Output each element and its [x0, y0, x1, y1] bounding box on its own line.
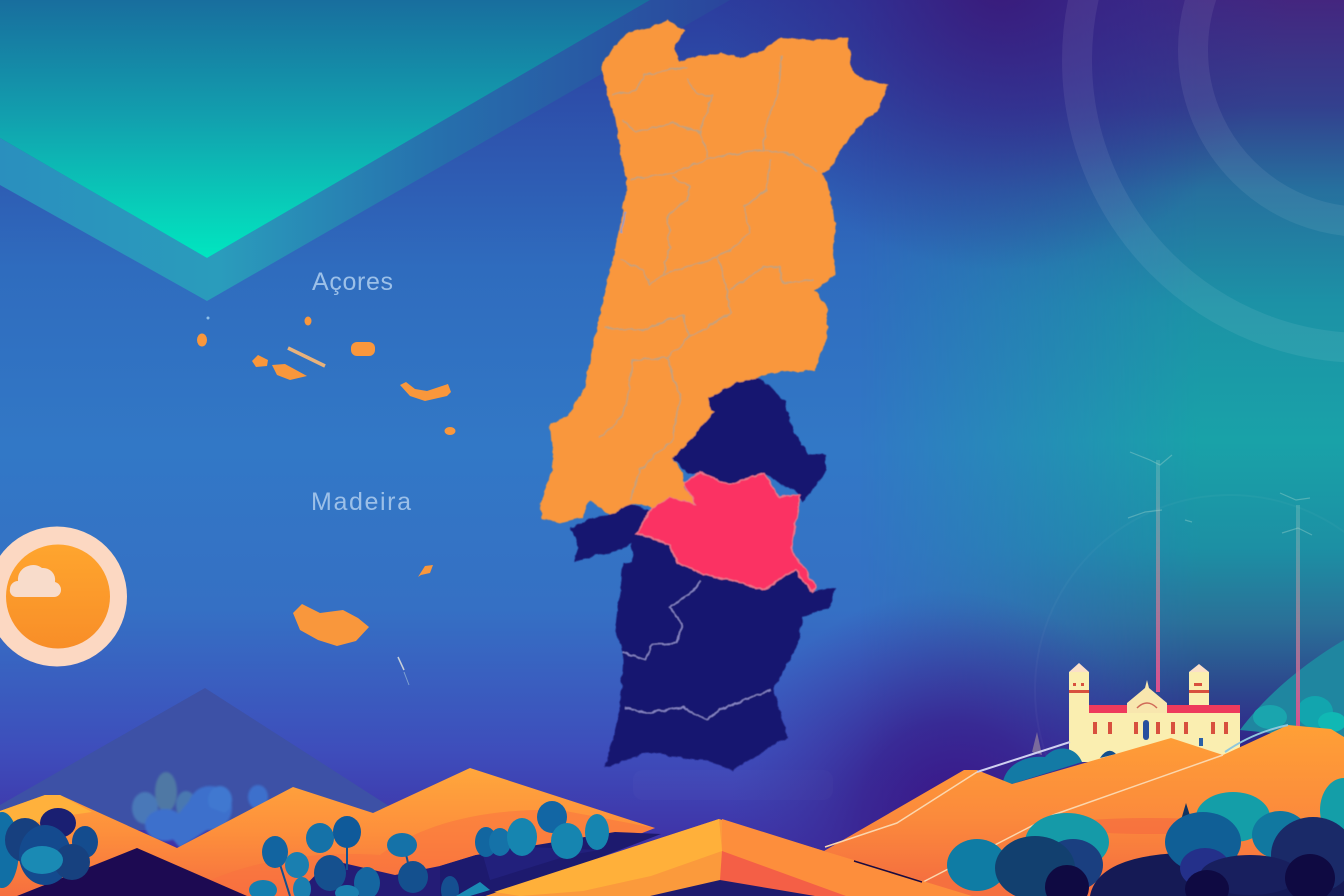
ridge trees: [441, 801, 609, 896]
church building: [1069, 663, 1240, 765]
central foreground mountain: [461, 819, 972, 896]
icon: cloud: [10, 565, 61, 597]
middle trees: [249, 816, 490, 896]
map: mainland Portugal: [540, 20, 888, 770]
top-left chevron band: [0, 0, 730, 301]
dark foothill: [17, 848, 247, 896]
label: Açores: Açores: [312, 268, 393, 296]
poles: [1128, 452, 1312, 730]
right foreground trees: [947, 778, 1344, 896]
region: southern districts (navy): [570, 377, 835, 770]
hill trail lines: [825, 725, 1288, 882]
region: northern and central districts (orange): [540, 20, 888, 523]
back mountain with ghost trees: [0, 688, 392, 848]
trees left of church: [1003, 732, 1116, 784]
sun badge: [0, 526, 127, 666]
district borders north: [600, 57, 817, 500]
label: Madeira: Madeira: [311, 488, 411, 516]
region: Évora (highlighted pink): [637, 473, 817, 592]
top-left chevron: [0, 0, 650, 258]
right orange hills: [824, 725, 1344, 896]
left trees: [0, 808, 98, 888]
islands: Madeira: [293, 565, 433, 685]
concentric arcs top right: [1035, 0, 1344, 885]
right teal background hill: [1240, 640, 1344, 740]
islands: Açores: [197, 316, 456, 435]
left orange mountains: [0, 768, 655, 896]
Aveiro lagoon: [621, 212, 625, 232]
dark ridge behind central peak: [440, 832, 661, 896]
district borders south: [623, 580, 770, 720]
